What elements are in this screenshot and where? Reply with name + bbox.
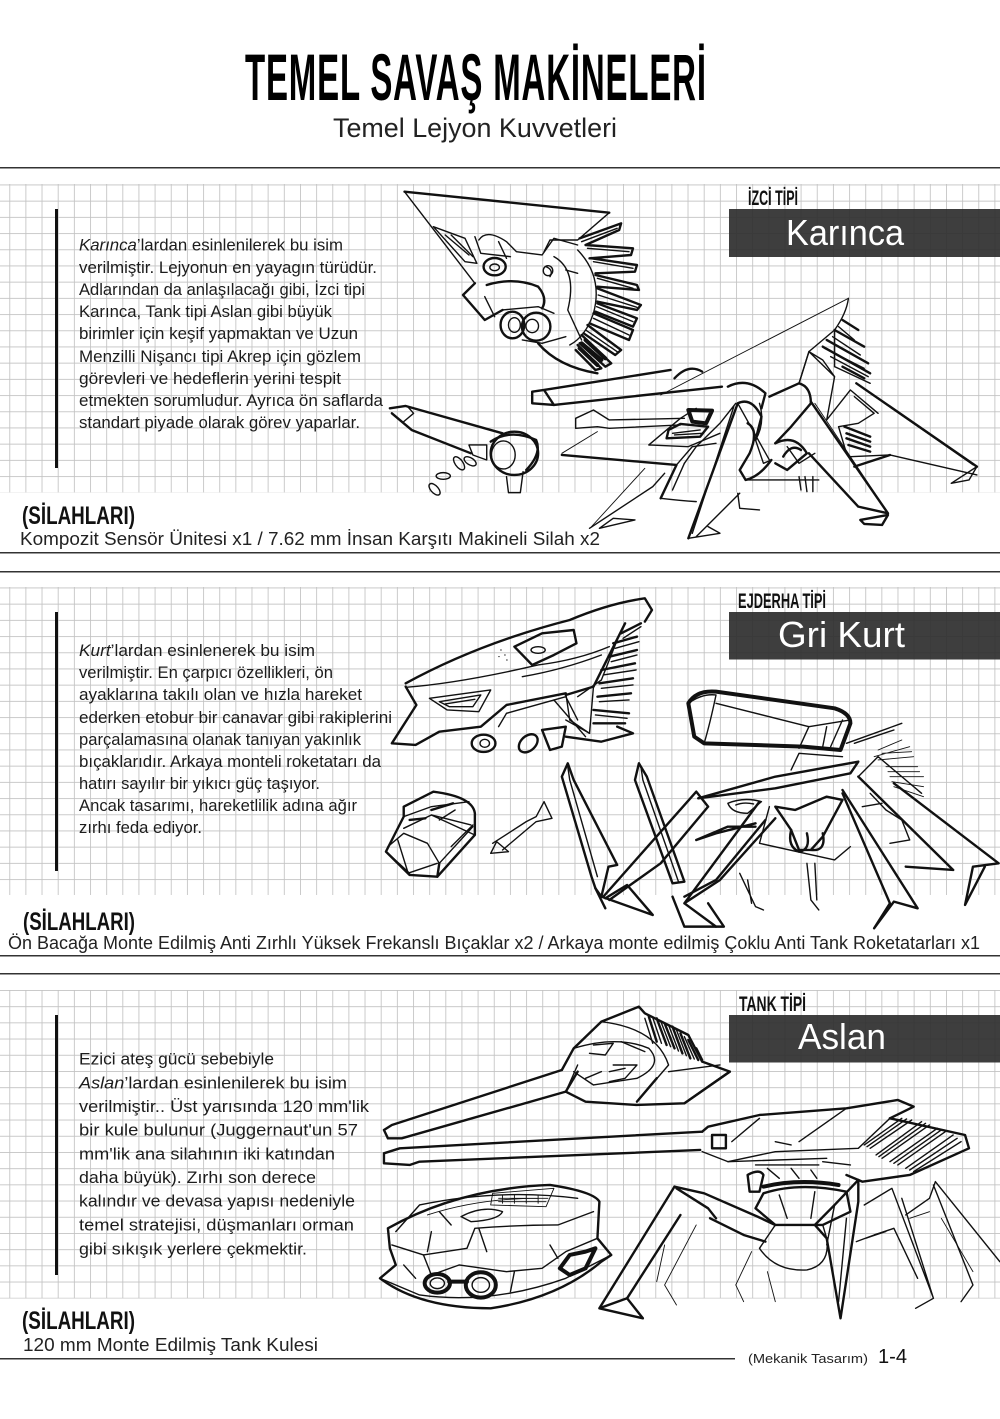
text block: Gri Kurt description: hatırı sayılır bir yıkıcı güç taşıyor.: [79, 774, 320, 793]
text block: Karınca description: Adlarından da anlaşılacağı gibi, İzci tipi: [79, 280, 365, 299]
sketch: turret close-up: [384, 1007, 730, 1138]
text block: Gri Kurt description: zırhı feda ediyor.: [79, 818, 202, 837]
type label: İZCİ TİPİ: [748, 187, 798, 210]
name banner: Karınca: [786, 212, 905, 253]
footer: page number: 1-4: [878, 1346, 907, 1368]
text block: Aslan description: mm'lik ana silahının iki katından: [79, 1144, 335, 1164]
text block: Karınca description: standart piyade olarak görev yaparlar.: [79, 413, 360, 432]
text block: Gri Kurt description: bıçaklarıdır. Arkaya monteli roketatarı da: [79, 752, 382, 771]
text block: Aslan description: kalındır ve devasa yapısı nedeniyle: [79, 1192, 355, 1210]
text block: Aslan description: gibi sıkışık yerlere çekmektir.: [79, 1240, 307, 1258]
footer: section label: (Mekanik Tasarım): [748, 1351, 868, 1366]
panel: Karınca: [0, 184, 1000, 549]
text block: Gri Kurt description: Kurt’lardan esinlenerek bu isim: [79, 641, 315, 660]
vertical accent bar: [55, 1015, 58, 1275]
panel: Aslan: [0, 990, 1000, 1355]
sketch: hull close-up: [380, 1185, 611, 1308]
panel: Gri Kurt: [0, 587, 1000, 953]
text block: Gri Kurt description: parçalamasına olanak tanıyan yakınlık: [79, 730, 361, 749]
weapons heading: (SİLAHLARI): [22, 502, 135, 530]
illustration: Gri Kurt sketches: [386, 598, 999, 928]
illustration: Aslan sketches: [380, 1007, 1000, 1318]
name banner: [729, 612, 1000, 660]
text block: Aslan description: bir kule bulunur (Juggernaut'un 57: [79, 1120, 358, 1140]
sketch: head close-up: [392, 598, 652, 755]
sketch: rocket: [491, 802, 552, 853]
sketch: full Karınca unit: [532, 298, 977, 538]
name banner: Aslan: [798, 1016, 886, 1057]
text block: Gri Kurt description: ederken etobur bir canavar gibi rakiplerini: [79, 708, 392, 727]
name banner: [729, 1015, 1000, 1062]
text block: Gri Kurt description: ayaklarına takılı olan ve hızla hareket: [79, 685, 362, 704]
sketch: rocket pod: [386, 792, 475, 877]
sketch: full Aslan unit: [384, 1100, 1000, 1318]
sketch: head close-up: [405, 192, 641, 373]
vertical accent bar: [55, 612, 58, 871]
text block: Aslan description: Aslan’lardan esinlenilerek bu isim: [78, 1074, 347, 1092]
text block: Karınca description: verilmiştir. Lejyonun en yayagın türüdür.: [79, 258, 377, 277]
grid background: [0, 587, 1000, 895]
text block: Aslan description: verilmiştir.. Üst yarısında 120 mm'lik: [79, 1097, 370, 1116]
text block: Karınca description: etmekten sorumludur. Ayrıca ön saflarda: [79, 391, 384, 410]
text block: Karınca description: Karınca’lardan esinlenilerek bu isim: [79, 236, 343, 254]
type label: EJDERHA TİPİ: [738, 590, 826, 613]
weapons heading: (SİLAHLARI): [23, 908, 135, 936]
name banner: Gri Kurt: [778, 614, 905, 655]
grid background: [0, 990, 1000, 1298]
text block: Aslan description: [78, 1050, 370, 1258]
grid background: [0, 184, 1000, 492]
text block: Gri Kurt description: [79, 641, 392, 837]
text block: Karınca description: görevleri ve hedeflerin yerini tespit: [79, 369, 341, 388]
text block: Karınca description: Karınca, Tank tipi Aslan gibi büyük: [79, 302, 332, 321]
text block: Aslan description: Ezici ateş gücü sebebiyle: [79, 1050, 274, 1068]
weapons list: Ön Bacağa Monte Edilmiş Anti Zırhlı Yüksek Frekanslı Bıçaklar x2 / Arkaya monte edilmiş Çoklu Anti Tank Roketatarları x1: [8, 933, 980, 953]
illustration: Karınca sketches: [390, 192, 977, 538]
text block: Karınca description: [79, 236, 384, 432]
title: TEMEL SAVAŞ MAKİNELERİ: [245, 42, 706, 115]
sketch: gun turret: [390, 406, 538, 497]
weapons list: 120 mm Monte Edilmiş Tank Kulesi: [23, 1335, 318, 1355]
vertical accent bar: [55, 209, 58, 468]
weapons list: Kompozit Sensör Ünitesi x1 / 7.62 mm İnsan Karşıtı Makineli Silah x2: [20, 529, 600, 549]
subtitle: Temel Lejyon Kuvvetleri: [333, 113, 617, 143]
sketch: full Gri Kurt unit: [562, 691, 999, 928]
text block: Gri Kurt description: Ancak tasarımı, hareketlilik adına ağır: [79, 796, 357, 815]
weapons heading: (SİLAHLARI): [22, 1307, 135, 1335]
text block: Aslan description: temel stratejisi, düşmanları orman: [79, 1216, 354, 1234]
text block: Gri Kurt description: verilmiştir. En çarpıcı özellikleri, ön: [79, 663, 333, 682]
text block: Karınca description: Menzilli Nişancı tipi Akrep için gözlem: [79, 347, 361, 366]
text block: Karınca description: birimler için keşif yapmaktan ve Uzun: [79, 324, 358, 343]
type label: TANK TİPİ: [739, 993, 806, 1016]
name banner: [729, 209, 1000, 257]
text block: Aslan description: daha büyük). Zırhı son derece: [79, 1168, 316, 1187]
